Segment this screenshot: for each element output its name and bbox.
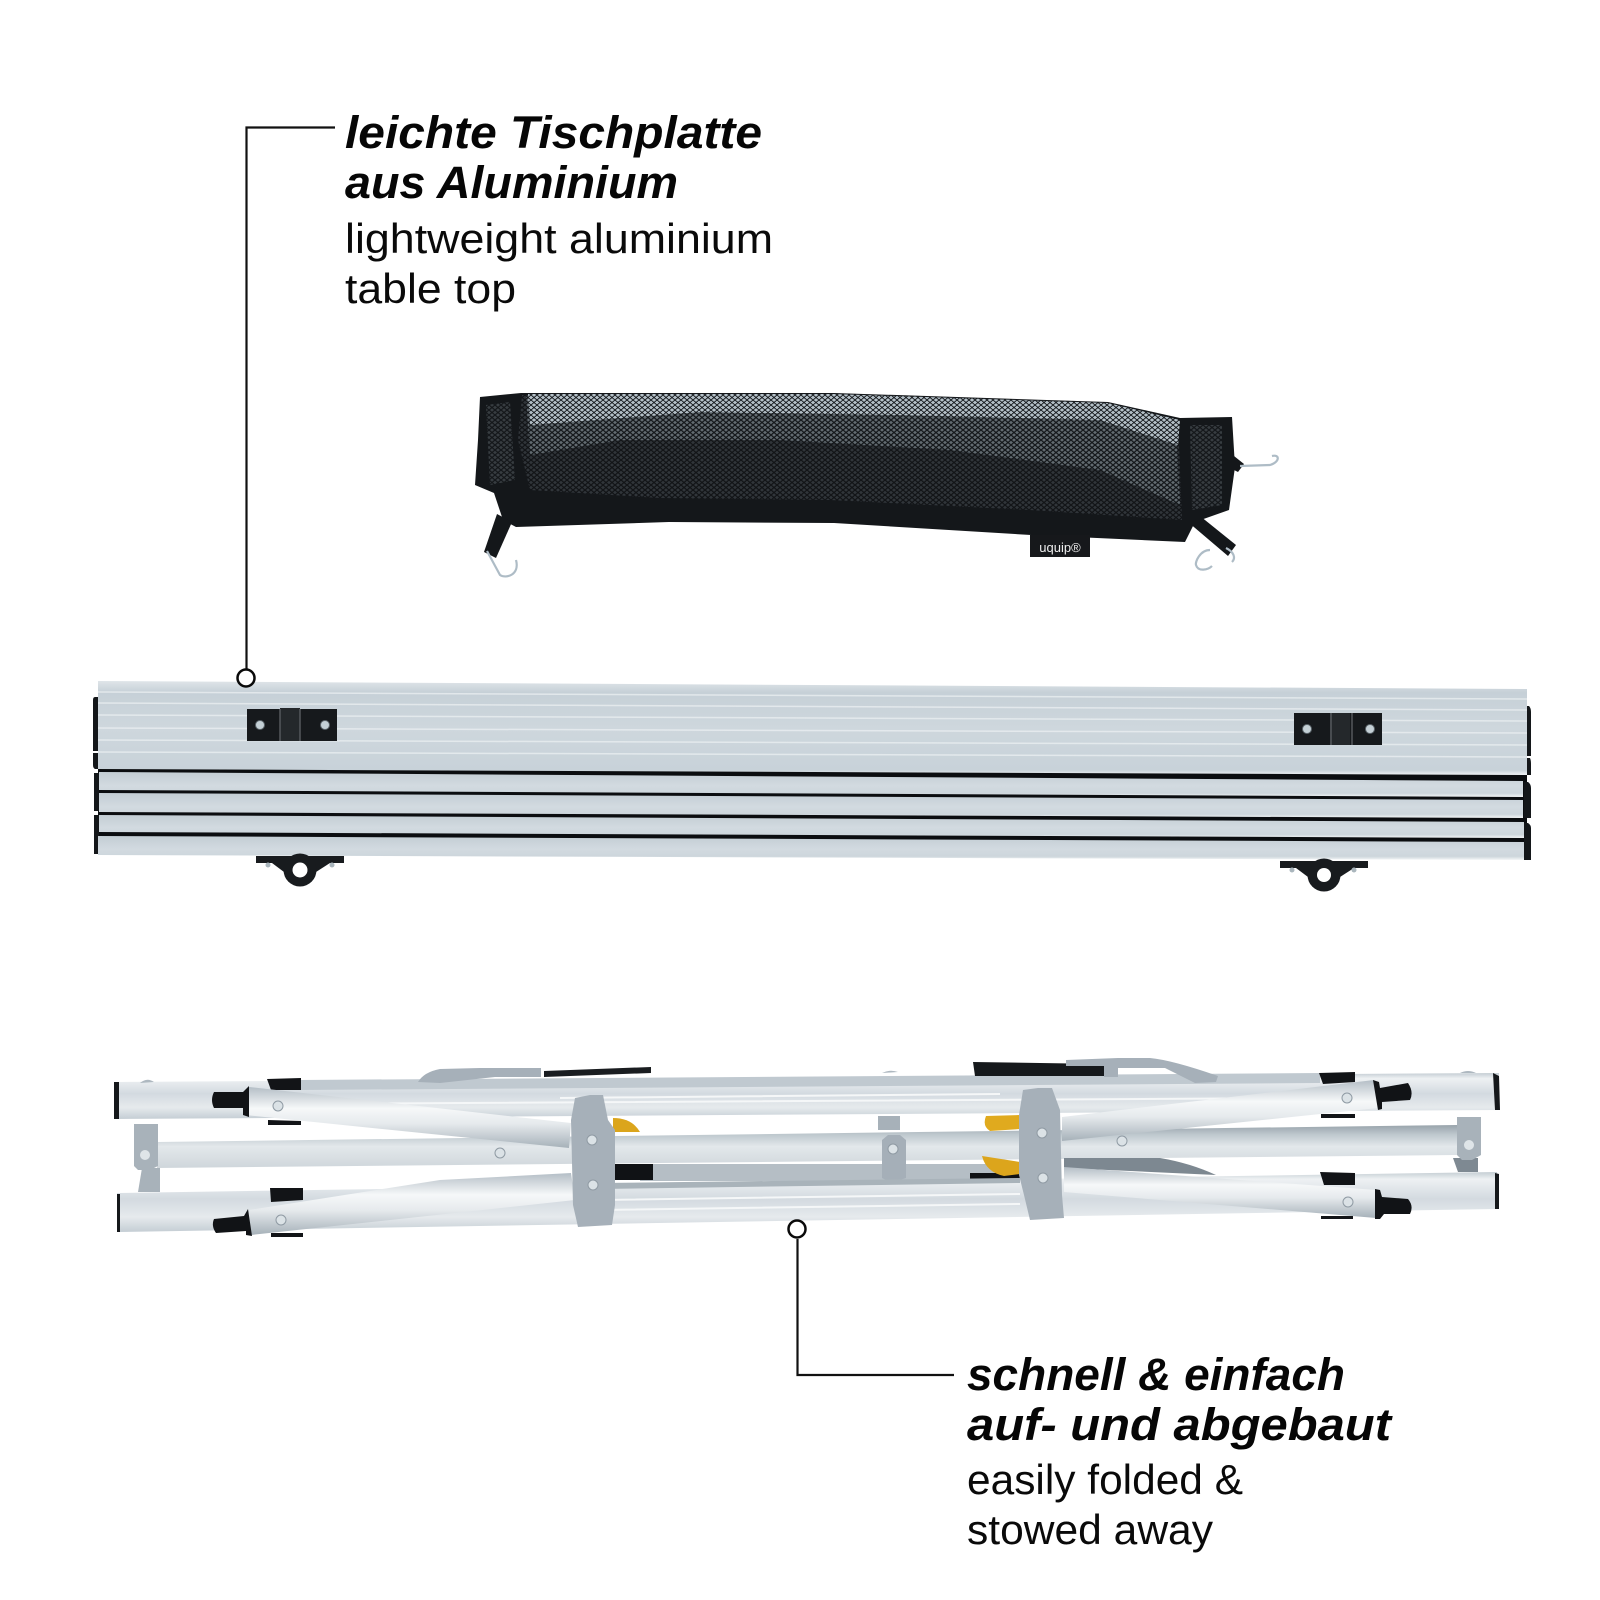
strap: yellow left bbox=[613, 1118, 640, 1132]
black gaps behind slats bbox=[98, 768, 1527, 845]
heading: table top: aus Aluminium bbox=[345, 157, 678, 208]
centre bracket bbox=[882, 1135, 906, 1180]
slat 1 bbox=[99, 772, 1523, 797]
callout: easily folded and stowed away bbox=[788, 1220, 1393, 1553]
hook: left bbox=[487, 551, 517, 576]
end caps: left bbox=[93, 697, 99, 854]
slat 2 bbox=[99, 793, 1523, 818]
tube: bottom left bbox=[249, 1173, 575, 1235]
centre plate: left bbox=[571, 1095, 615, 1227]
tube: top left bbox=[245, 1087, 571, 1148]
handle: top left bbox=[418, 1068, 541, 1083]
top rail lip bbox=[300, 1073, 1320, 1090]
strap: yellow lower bbox=[982, 1156, 1020, 1176]
main panel bbox=[98, 681, 1527, 775]
folded table top bbox=[93, 681, 1531, 892]
lower strap right bbox=[1064, 1158, 1216, 1175]
strap: left bbox=[484, 514, 512, 558]
black clips bbox=[267, 1072, 1355, 1237]
storage bag bbox=[475, 393, 1278, 576]
hook: right top bbox=[1240, 456, 1278, 466]
heading: frame: schnell & einfach bbox=[967, 1349, 1345, 1400]
cap: top left bbox=[212, 1086, 249, 1117]
handle: top right bbox=[1066, 1058, 1218, 1083]
mesh: side panels bbox=[486, 402, 1222, 510]
strap: right bbox=[1188, 516, 1236, 556]
slat 3 bbox=[99, 815, 1524, 838]
lower rail dark top bbox=[600, 1178, 1020, 1189]
hook: right bottom bbox=[1196, 548, 1234, 570]
mesh: middle bbox=[526, 395, 1180, 505]
tube: top right bbox=[1062, 1080, 1378, 1141]
cap: top right bbox=[1373, 1080, 1412, 1110]
strap: yellow upper bbox=[985, 1115, 1020, 1131]
lower rail stripes bbox=[600, 1194, 1020, 1210]
text: table top translation: table top bbox=[345, 265, 516, 312]
centre plate: right bbox=[1019, 1088, 1064, 1220]
lower inner rail bbox=[640, 1164, 1020, 1181]
ring fastener: left bbox=[256, 854, 344, 886]
strap: right top bbox=[1234, 456, 1244, 472]
callout: lightweight aluminium table top bbox=[238, 107, 773, 686]
lower rail end caps bbox=[117, 1173, 1499, 1232]
text: table top translation: lightweight aluminium bbox=[345, 215, 773, 262]
plate screws bbox=[273, 1093, 1353, 1225]
cap: bottom left bbox=[213, 1209, 252, 1236]
mesh: upper light bbox=[528, 394, 1180, 445]
mesh: lower dark bbox=[518, 395, 1182, 520]
text: frame translation: easily folded & bbox=[967, 1456, 1243, 1503]
leader line: frame bbox=[798, 1239, 954, 1375]
handle strip: dark bbox=[544, 1067, 651, 1077]
bag body bbox=[475, 393, 1235, 542]
lower inner rail black block bbox=[612, 1164, 1020, 1180]
ring fastener: right bbox=[1280, 858, 1368, 892]
top rail end caps bbox=[114, 1073, 1500, 1119]
connector: right bbox=[1453, 1117, 1481, 1172]
cap: bottom right bbox=[1375, 1189, 1412, 1219]
marker: frame bbox=[788, 1220, 806, 1238]
end caps: right bbox=[1524, 706, 1531, 860]
lower rail bbox=[117, 1172, 1497, 1232]
centre bracket top bbox=[878, 1116, 900, 1130]
hinge bracket: left bbox=[247, 708, 337, 741]
tube: bottom right bbox=[1064, 1167, 1376, 1218]
slat 4 bbox=[98, 836, 1524, 860]
screw heads on rails bbox=[140, 1071, 1476, 1083]
folded table frame bbox=[114, 1058, 1500, 1237]
heading: table top: leichte Tischplatte bbox=[345, 107, 762, 158]
connector: left bbox=[134, 1124, 160, 1192]
label: uquip: uquip® bbox=[1039, 540, 1081, 555]
hinge bracket: right bbox=[1294, 713, 1382, 745]
handle strip: black bbox=[973, 1062, 1104, 1076]
label: uquip bbox=[1030, 535, 1090, 557]
marker: table top bbox=[238, 670, 254, 686]
top rail bbox=[115, 1073, 1499, 1119]
panel stripes bbox=[98, 692, 1527, 757]
top rail stripes bbox=[300, 1094, 1320, 1104]
leader line: table top bbox=[246, 128, 335, 669]
middle rail bbox=[157, 1125, 1457, 1168]
heading: frame: auf- und abgebaut bbox=[967, 1399, 1393, 1450]
text: frame translation: stowed away bbox=[967, 1506, 1213, 1553]
